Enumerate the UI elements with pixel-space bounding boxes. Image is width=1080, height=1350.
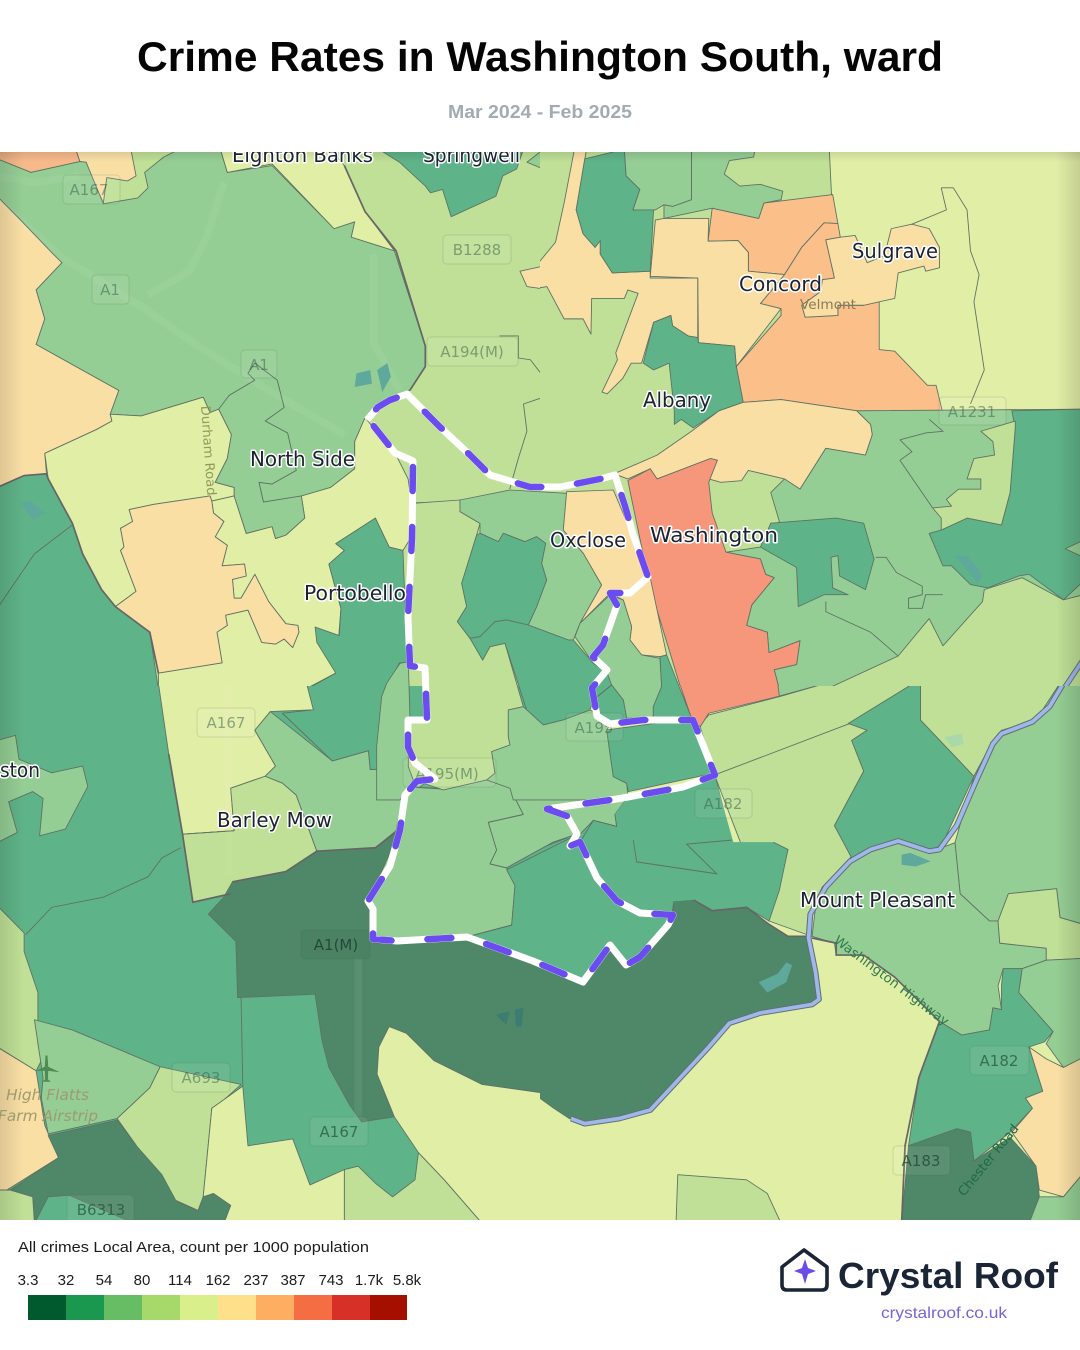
place names: Sulgrave <box>852 239 938 263</box>
place names: Albany <box>643 388 711 412</box>
minor map labels: High Flatts <box>6 1086 89 1104</box>
road corridors south-west <box>354 960 362 1116</box>
road number badges: A693 <box>182 1069 220 1087</box>
place names: Springwell <box>423 143 520 167</box>
place names: ston <box>0 758 40 782</box>
legend values: 743 <box>318 1272 344 1289</box>
road number badges: A1(M) <box>314 936 358 954</box>
legend values: 32 <box>58 1272 74 1289</box>
icon: pond east <box>955 556 983 583</box>
road number badges: A1 <box>100 281 120 299</box>
road number badges <box>63 175 1029 1223</box>
place names: Eighton Banks <box>232 143 373 167</box>
road number badges: A195 <box>575 719 613 737</box>
road number badges: A167 <box>70 181 108 199</box>
legend: All crimes Local Area, count per 1000 population <box>18 1239 369 1256</box>
logo: Crystal Roof: crystalroof.co.uk <box>881 1305 1008 1322</box>
ward interior south <box>369 778 774 938</box>
icon: house with star <box>782 1250 827 1290</box>
road number badges: A1231 <box>948 403 996 421</box>
road number badges: B6313 <box>77 1201 125 1219</box>
minor map labels: Durham Road <box>197 405 218 496</box>
legend <box>18 1239 422 1320</box>
place names <box>0 143 955 912</box>
road number badges: A1 <box>249 356 269 374</box>
ward interior north <box>377 490 713 800</box>
legend values: 54 <box>96 1272 112 1289</box>
place names: Portobello <box>304 581 406 605</box>
map: north-east quadrant <box>540 152 1080 686</box>
date range subtitle: Mar 2024 - Feb 2025 <box>448 102 632 122</box>
minor map labels: Washington Highway <box>831 933 952 1030</box>
road number badges: A183 <box>902 1152 940 1170</box>
icon: airstrip plane <box>36 1056 60 1082</box>
legend values: 5.8k <box>393 1272 422 1289</box>
road number badges: A195(M) <box>415 765 479 783</box>
legend values: 162 <box>205 1272 231 1289</box>
logo: Crystal Roof <box>782 1250 1059 1322</box>
icon: ponds <box>21 363 391 520</box>
map: north-west quadrant <box>0 152 540 686</box>
legend colour scale <box>28 1295 407 1320</box>
icon: ponds south east <box>759 853 931 993</box>
title: Crime Rates in Washington South, ward <box>137 33 943 80</box>
ward boundary: Washington South <box>367 394 715 982</box>
legend values: 387 <box>280 1272 306 1289</box>
minor map labels: Chester Road <box>955 1122 1022 1200</box>
place names: Washington <box>650 523 778 547</box>
legend values: 1.7k <box>355 1272 384 1289</box>
map edge shading <box>0 152 1080 1220</box>
place names: Oxclose <box>550 528 626 552</box>
place names: Barley Mow <box>217 808 332 832</box>
road number badges: B1288 <box>453 241 501 259</box>
road number badges: A167 <box>207 714 245 732</box>
road number badges: A182 <box>980 1052 1018 1070</box>
place names: Mount Pleasant <box>800 888 955 912</box>
minor map labels: Velmont <box>800 298 856 313</box>
place names: North Side <box>250 447 355 471</box>
place names: Concord <box>739 272 822 296</box>
main road corridors <box>0 176 399 435</box>
legend values: 80 <box>134 1272 150 1289</box>
minor map labels: Farm Airstrip <box>0 1107 98 1125</box>
legend values: 3.3 <box>18 1272 38 1289</box>
road number badges: A182 <box>704 795 742 813</box>
icon: forest ponds <box>496 1008 523 1027</box>
minor map labels <box>0 298 1022 1200</box>
logo: Crystal Roof: Crystal Roof <box>838 1255 1059 1296</box>
map: south-east quadrant <box>540 686 1080 1220</box>
legend values: 114 <box>168 1272 192 1289</box>
legend values: 237 <box>243 1272 269 1289</box>
river <box>571 683 1063 1124</box>
road number badges: A194(M) <box>440 343 504 361</box>
road number badges: A167 <box>320 1123 358 1141</box>
legend values <box>18 1272 422 1289</box>
map: south-west quadrant <box>0 686 540 1220</box>
